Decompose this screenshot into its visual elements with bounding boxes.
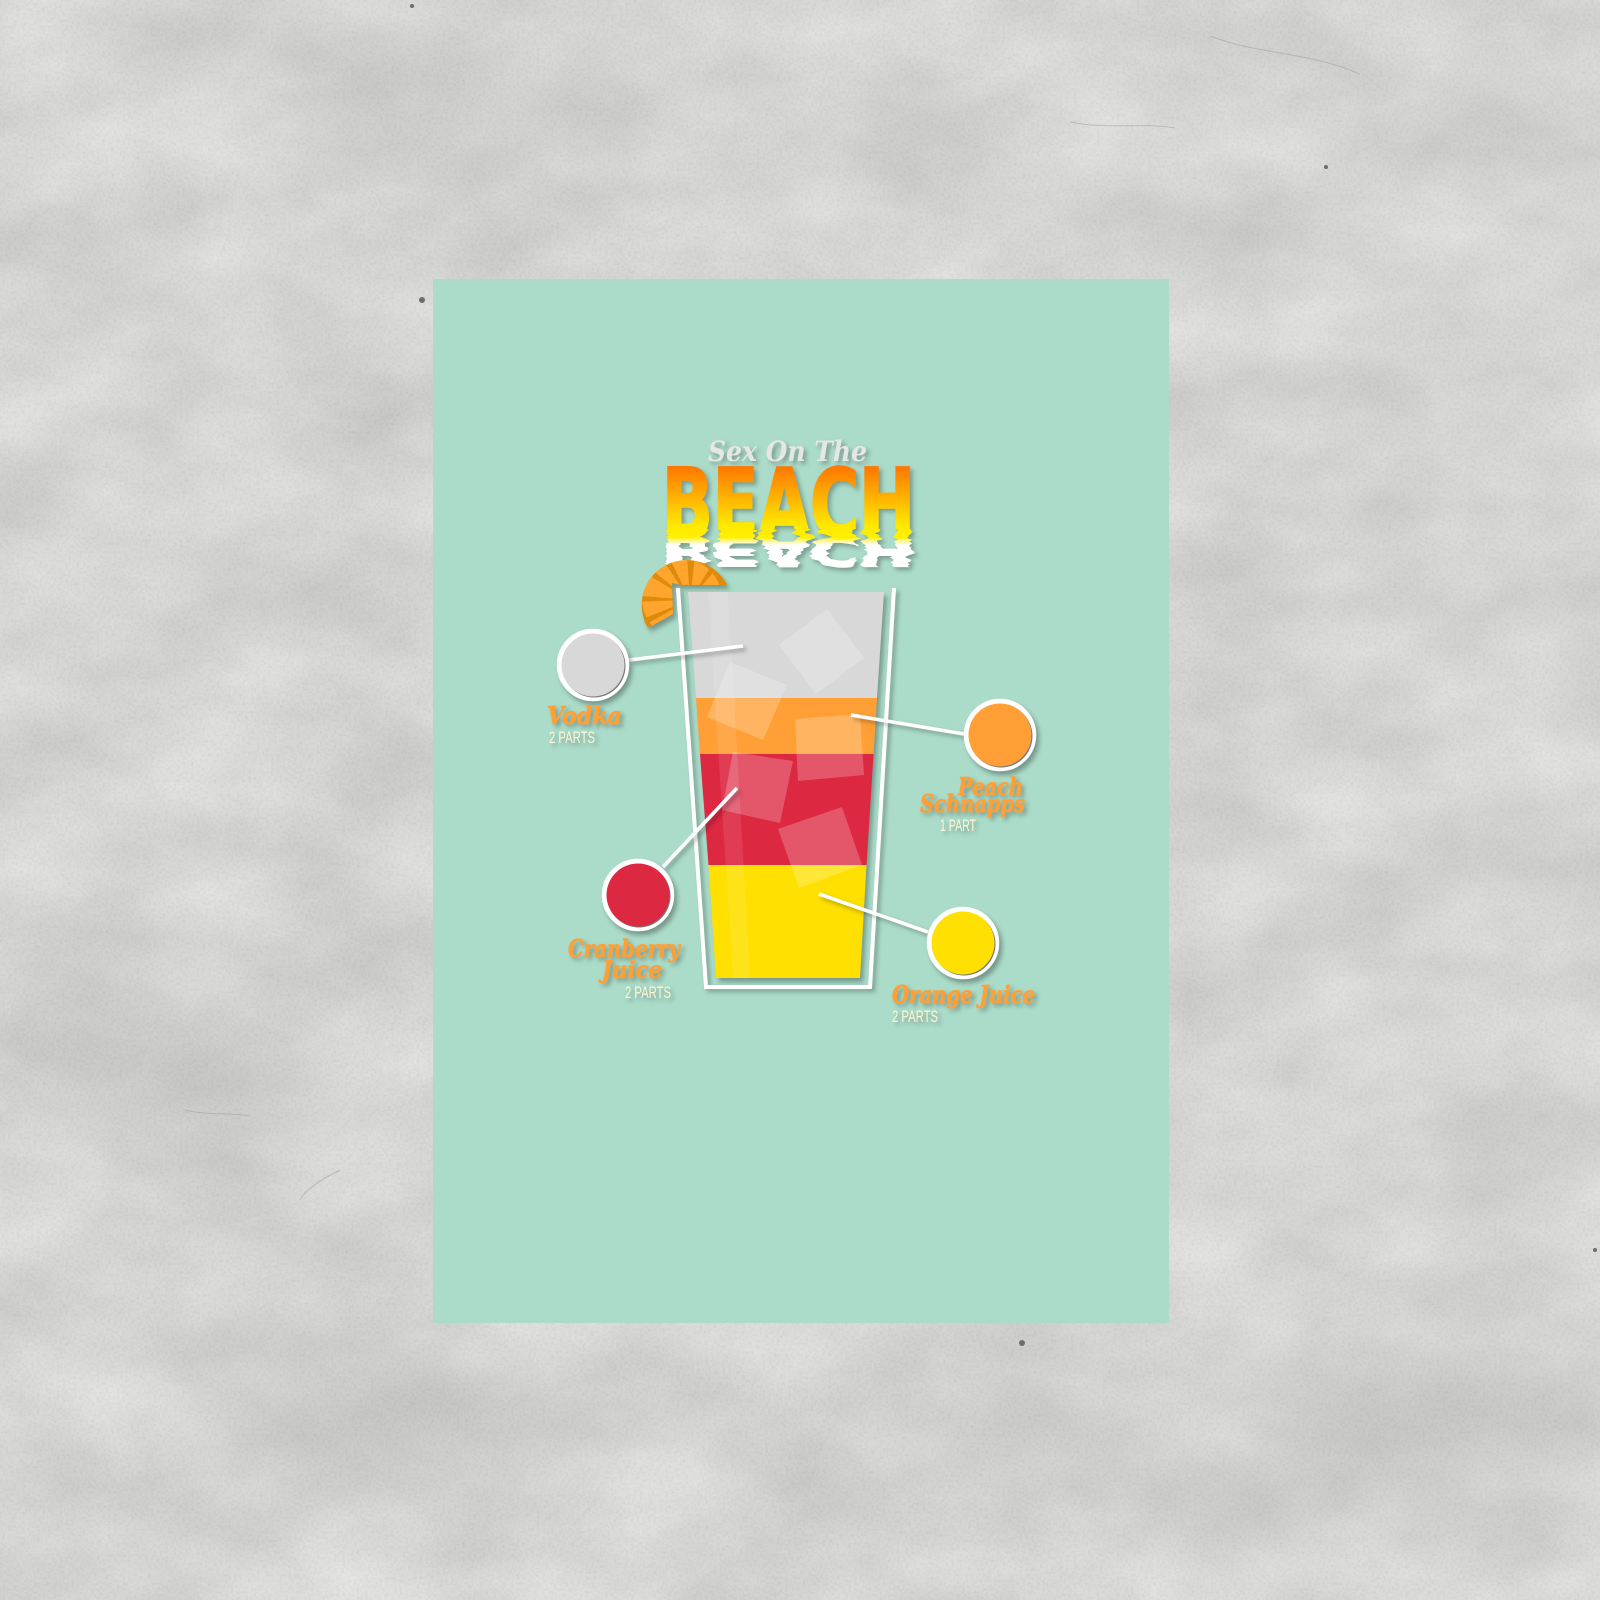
callout: vodka: 2 PARTS <box>549 728 595 747</box>
callout: vodka <box>547 631 743 747</box>
ice cubes <box>707 609 864 888</box>
callout: cranberry juice: Cranberry <box>568 934 682 963</box>
cocktail glass and liquid layers <box>678 588 894 987</box>
poster panel <box>433 279 1169 1323</box>
callout: vodka: Vodka <box>547 701 622 730</box>
callout: cranberry juice: Juice <box>598 955 662 984</box>
callout: peach schnapps: 1 PART <box>940 816 976 835</box>
callout: orange juice <box>819 894 1035 1026</box>
callout: peach schnapps: Schnapps <box>920 789 1025 818</box>
callout: cranberry juice: 2 PARTS <box>625 983 671 1002</box>
icon: orange slice garnish <box>642 560 731 634</box>
title: BEACH with water reflection <box>662 450 915 574</box>
callout: peach schnapps <box>851 701 1034 835</box>
callout: orange juice: Orange Juice <box>892 980 1035 1009</box>
glass outline <box>678 588 894 987</box>
title: BEACH with water reflection: BEACH <box>662 450 915 560</box>
glass highlight <box>708 592 750 978</box>
title: BEACH with water reflection: BEACH <box>662 527 915 574</box>
callout: peach schnapps: Peach <box>957 772 1023 801</box>
callout: cranberry juice <box>568 788 737 1002</box>
liquid layers <box>688 592 884 978</box>
callout: orange juice: 2 PARTS <box>892 1007 938 1026</box>
title: Sex On The: Sex On The <box>708 435 867 468</box>
